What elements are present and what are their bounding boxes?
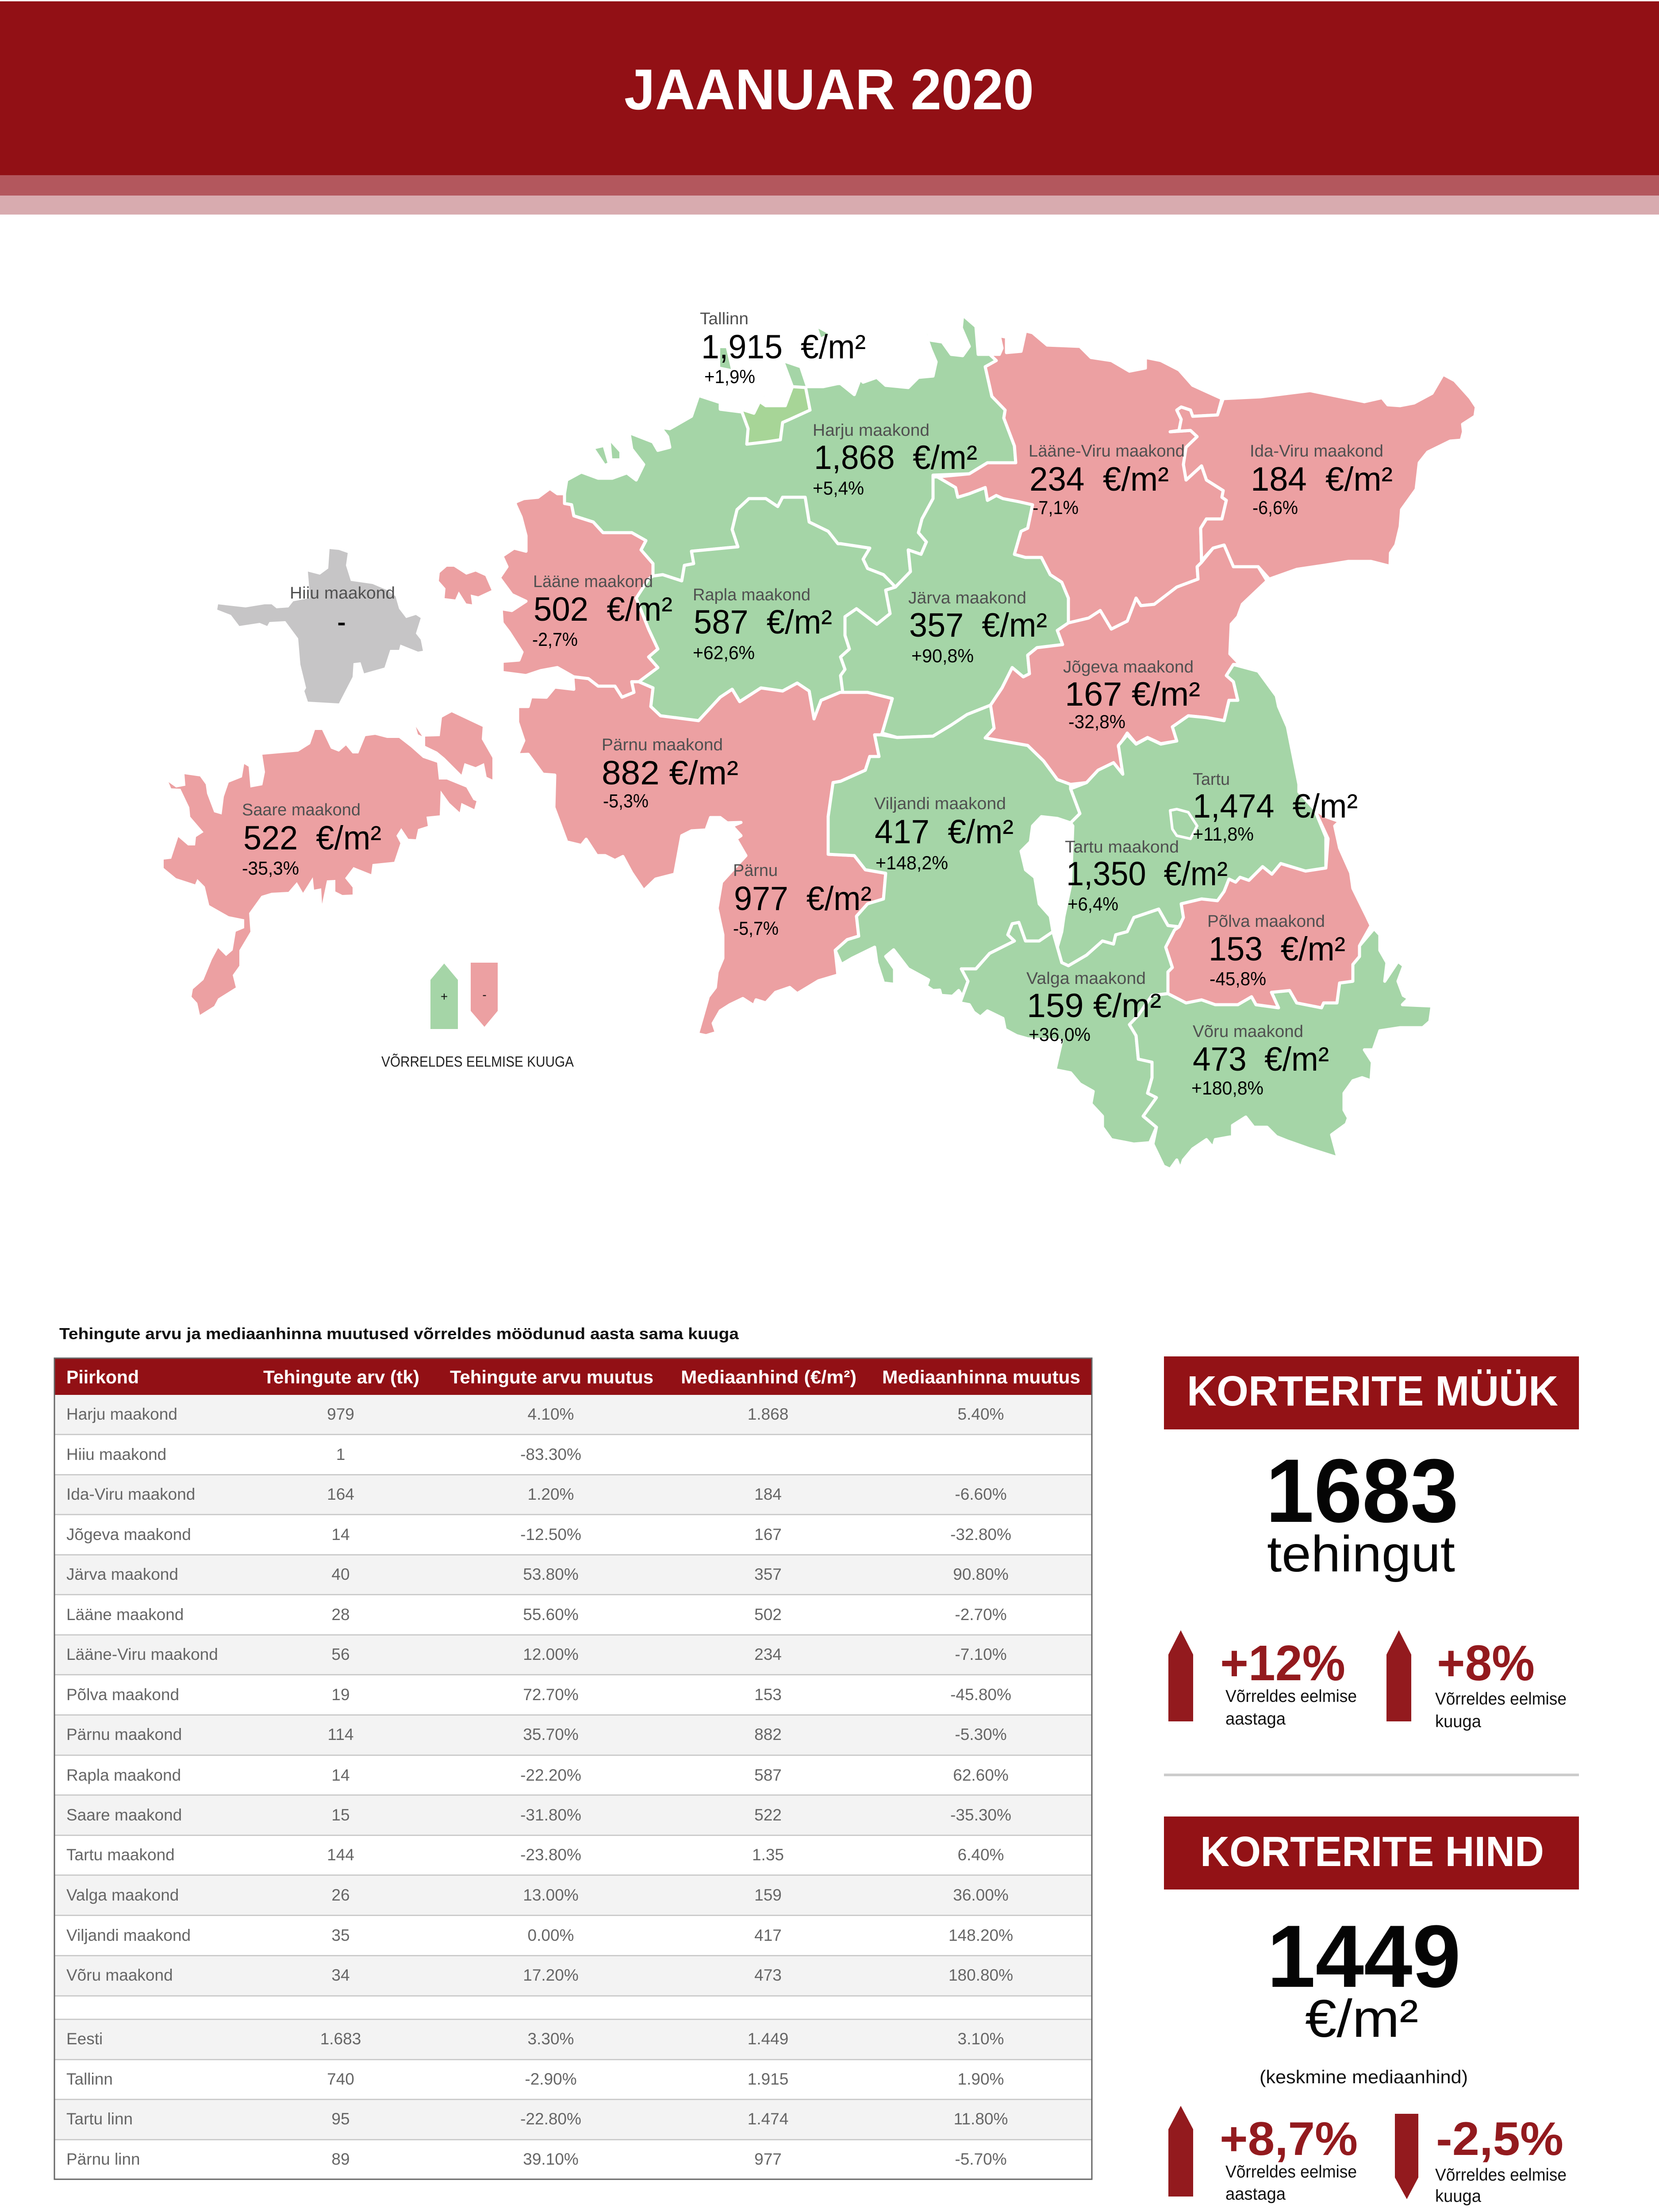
row: Hiiu maakond: 1 [336,1445,345,1463]
row: Tallinn: 1.915 [748,2070,788,2088]
map label: Lääne-Viru: Lääne-Viru maakond [1029,442,1185,461]
row: Võru maakond: 17.20% [523,1966,579,1984]
row: Viljandi maakond: 148.20% [949,1926,1013,1944]
map label: Jõgeva: 167 €/m² [1065,676,1200,713]
stat: -2,5%: -2,5% [1436,2112,1563,2165]
map label: Hiiu: - [337,603,346,641]
row: Ida-Viru maakond: 1.20% [528,1485,574,1503]
row: Saare maakond: 15 [331,1806,350,1824]
row: Põlva maakond: Põlva maakond [66,1686,179,1704]
stat: -2,5%: Võrreldes eelmise [1435,2166,1567,2185]
row: Järva maakond: 53.80% [523,1565,579,1583]
stat: +8,7% [1220,2112,1358,2204]
row: Pärnu maakond: Pärnu maakond [66,1725,182,1743]
row: Järva maakond: 357 [754,1565,782,1583]
table header: Mediaanhinna muutus [882,1367,1080,1387]
county: Rapla [636,497,895,721]
row: Eesti: 1.449 [748,2030,788,2048]
stat: +8%: +8% [1437,1635,1535,1691]
row: Eesti: 1.683 [320,2030,361,2048]
map legend [381,963,574,1070]
map label: Hiiu: Hiiu maakond [290,584,395,603]
map label: Jõgeva: Jõgeva maakond [1063,658,1194,676]
row: Rapla maakond: -22.20% [520,1766,581,1784]
row: Viljandi maakond [54,1926,1092,1956]
map label: Lääne [532,572,672,650]
county: Pärnu [518,677,892,1036]
row: Lääne-Viru maakond [54,1636,1092,1675]
county: Hiiu [217,549,423,703]
islands: Harju coast [595,329,828,464]
map label: Saare [242,801,381,879]
row: Tallinn: -2.90% [525,2070,577,2088]
row: Tallinn: 740 [327,2070,354,2088]
row: Pärnu linn: -5.70% [955,2150,1007,2168]
map label: Pärnu maakond [602,736,738,812]
stat: +12% [1220,1635,1357,1728]
row: Põlva maakond: 19 [331,1686,350,1704]
map label: Valga: 159 €/m² [1027,987,1161,1025]
row: Harju maakond: 5.40% [958,1405,1004,1423]
map label: Lääne-Viru [1029,442,1185,518]
map label: Tartu maakond [1065,838,1228,915]
row: Tartu maakond: Tartu maakond [66,1846,175,1864]
map label: Põlva [1207,912,1345,990]
row: Lääne-Viru maakond: Lääne-Viru maakond [66,1645,218,1663]
big number: 1683 tehingut: tehingut [1267,1526,1455,1582]
map label: Valga [1026,969,1161,1045]
row: Saare maakond: 522 [754,1806,782,1824]
map label: Rapla [693,586,832,664]
county: Saare [164,730,476,1015]
row: Pärnu maakond: 35.70% [523,1725,579,1743]
stat: +12%: aastaga [1225,1709,1286,1728]
row: Ida-Viru maakond: Ida-Viru maakond [66,1485,195,1503]
row: Lääne maakond: 502 [754,1605,782,1624]
map label: Põlva: 153 €/m² [1209,930,1345,968]
city: Tallinn [738,387,810,444]
row: Pärnu maakond: 114 [327,1725,354,1743]
row: Jõgeva maakond: Jõgeva maakond [66,1525,191,1544]
county: Võru [1129,929,1432,1169]
row: Jõgeva maakond: 167 [754,1525,782,1544]
row: Ida-Viru maakond: 164 [327,1485,354,1503]
map label: Pärnu [733,861,872,939]
row: Viljandi maakond: 417 [754,1926,782,1944]
big number: 1449 €/m²: (keskmine mediaanhind) [1260,2066,1468,2087]
map label: Pärnu: 977 €/m² [734,880,872,918]
map label: Jõgeva: -32,8% [1068,711,1125,733]
map label: Ida-Viru: Ida-Viru maakond [1250,442,1383,461]
map label: Harju: 1,868 €/m² [814,439,977,476]
arrow up: kuu [1386,1630,1411,1721]
panel: korterite müük [1164,1356,1579,1731]
map label: Tallinn [700,310,866,388]
stat: -2,5% [1435,2112,1567,2206]
map label: Hiiu [290,584,395,641]
row: Tartu linn [54,2100,1092,2140]
stat: +8%: kuuga [1435,1712,1481,1731]
map legend: VÕRRELDES EELMISE KUUGA [381,1053,574,1070]
county: Ida-Viru [1170,374,1476,579]
row: Võru maakond [54,1956,1092,1997]
row: Jõgeva maakond: -32.80% [950,1525,1011,1544]
map label: Võru: Võru maakond [1193,1022,1303,1041]
row: Saare maakond: Saare maakond [66,1806,182,1824]
row: Põlva maakond: 72.70% [523,1686,579,1704]
row: Lääne maakond: Lääne maakond [66,1605,184,1624]
map label: Saare: 522 €/m² [243,819,381,857]
table header [54,1359,1092,1395]
row: Pärnu maakond: 882 [754,1725,782,1743]
row: Pärnu maakond: -5.30% [955,1725,1007,1743]
row: Võru maakond: 34 [331,1966,350,1984]
map label: Rapla: 587 €/m² [694,603,832,641]
island: Muhu [425,712,492,780]
map label: Järva: Järva maakond [908,589,1026,607]
row: Järva maakond: Järva maakond [66,1565,178,1583]
map label: Pärnu maakond: 882 €/m² [602,754,738,792]
table header: Tehingute arvu muutus [450,1367,653,1387]
row: Võru maakond: 473 [754,1966,782,1984]
row: Rapla maakond [54,1766,1092,1796]
county: Põlva [1166,809,1371,1008]
county: Jõgeva [985,545,1267,784]
row: Lääne maakond: -2.70% [955,1605,1007,1624]
row: Hiiu maakond: Hiiu maakond [66,1445,166,1463]
map of Estonia [164,315,1476,1169]
row: Eesti [54,2019,1092,2060]
map label: Võru [1191,1022,1329,1099]
county: Tartu [1057,664,1326,966]
header banner [0,1,1659,215]
row: Viljandi maakond: 0.00% [528,1926,574,1944]
map label: Tartu maakond: Tartu maakond [1065,838,1179,856]
map label: Tartu: 1,474 €/m² [1193,787,1358,825]
big number: 1683 tehingut: 1683 [1266,1440,1459,1541]
row: Tartu linn: 1.474 [748,2110,788,2128]
row: Ida-Viru maakond [54,1475,1092,1515]
map label: Võru: 473 €/m² [1193,1041,1329,1078]
map label: Ida-Viru: -6,6% [1252,497,1298,518]
map label: Tartu: +11,8% [1193,824,1254,845]
arrow up: aasta [1168,2106,1193,2197]
big number: 1683 tehingut [1266,1440,1459,1582]
row: Lääne-Viru maakond: 234 [754,1645,782,1663]
row: Pärnu maakond [54,1716,1092,1756]
map label: Pärnu: -5,7% [733,918,779,939]
row: Valga maakond [54,1876,1092,1916]
map label: Viljandi: 417 €/m² [875,813,1014,851]
stat: +12%: +12% [1220,1635,1345,1691]
table title: Tehingute arvu ja mediaanhinna muutused võrreldes möödunud aasta sama kuuga [59,1325,739,1343]
map label: Võru: +180,8% [1191,1078,1263,1099]
map label: Tartu: Tartu [1193,770,1230,789]
row: Valga maakond: Valga maakond [66,1886,179,1904]
row: Põlva maakond: 153 [754,1686,782,1704]
map label: Tartu [1193,770,1358,845]
data table [54,1358,1092,2179]
map label: Pärnu: Pärnu [733,861,778,880]
row: Eesti: 3.30% [528,2030,574,2048]
row: Võru maakond: Võru maakond [66,1966,173,1984]
row: Eesti: 3.10% [958,2030,1004,2048]
map label: Viljandi [874,795,1014,874]
row: Valga maakond: 13.00% [523,1886,579,1904]
row: Lääne-Viru maakond: -7.10% [955,1645,1007,1663]
row: Jõgeva maakond: -12.50% [520,1525,581,1544]
map label: Saare: Saare maakond [242,801,361,819]
row: Lääne-Viru maakond: 56 [331,1645,350,1663]
map label: Tallinn: Tallinn [700,310,749,328]
row: Valga maakond: 159 [754,1886,782,1904]
map label: Pärnu maakond: Pärnu maakond [602,736,723,754]
county: Lääne [499,488,658,697]
map label: Järva: 357 €/m² [909,607,1047,644]
table header: Piirkond [66,1367,139,1387]
stat: +12%: Võrreldes eelmise [1225,1687,1357,1706]
map label: Tartu maakond: +6,4% [1068,894,1118,915]
row: Pärnu linn: 39.10% [523,2150,579,2168]
row: Tartu linn: 11.80% [954,2110,1008,2128]
row: Tartu maakond: 144 [327,1846,354,1864]
islet [416,727,422,736]
row: Lääne maakond: 28 [331,1605,350,1624]
county: Valga [960,909,1179,1144]
row: Järva maakond: 90.80% [953,1565,1009,1583]
row: Harju maakond [54,1395,1092,1435]
row: Lääne maakond [54,1605,1092,1636]
county: Viljandi [828,705,1080,997]
map label: Harju: +5,4% [813,478,864,499]
row: Jõgeva maakond: 14 [331,1525,350,1544]
big number: 1449 €/m²: €/m² [1305,1989,1418,2048]
map label: Viljandi: +148,2% [876,853,948,874]
map label: Harju: Harju maakond [813,421,929,440]
map label: Tallinn: +1,9% [704,366,755,388]
map label: Lääne-Viru: 234 €/m² [1029,461,1169,498]
row: Hiiu maakond [54,1445,1092,1475]
row: Pärnu linn [66,2150,1007,2168]
heading: korterite müük: KORTERITE MÜÜK [1187,1367,1558,1415]
row: Tartu maakond [54,1846,1092,1876]
row: Hiiu maakond: -83.30% [520,1445,581,1463]
row: Pärnu linn: Pärnu linn [66,2150,140,2168]
stat: +8%: Võrreldes eelmise [1435,1690,1567,1709]
row: Saare maakond [54,1796,1092,1836]
row: Tallinn [54,2070,1092,2100]
table header: Mediaanhind (€/m²) [681,1367,856,1387]
row: Saare maakond: -35.30% [950,1806,1011,1824]
map legend: + [441,990,448,1003]
row: Harju maakond: 1.868 [748,1405,788,1423]
stat: +8,7%: Võrreldes eelmise [1225,2162,1357,2181]
row: Tartu linn: Tartu linn [66,2110,133,2128]
map label: Lääne-Viru: -7,1% [1033,497,1079,518]
header banner: JAANUAR 2020 [624,57,1034,122]
row: Tallinn: 1.90% [958,2070,1004,2088]
stat: +8,7%: aastaga [1225,2185,1286,2204]
row: Rapla maakond: 62.60% [953,1766,1009,1784]
map label: Ida-Viru: 184 €/m² [1251,461,1393,498]
map label: Rapla: Rapla maakond [693,586,810,604]
map label: Lääne: Lääne maakond [533,572,653,591]
map label: Pärnu maakond: -5,3% [603,791,649,812]
row: Viljandi maakond: 35 [331,1926,350,1944]
stat: -2,5%: kuuga [1435,2187,1481,2206]
row: Põlva maakond: -45.80% [950,1686,1011,1704]
row: Tartu linn: 95 [331,2110,350,2128]
row: Lääne maakond: 55.60% [523,1605,579,1624]
map label: Valga: Valga maakond [1026,969,1146,988]
arrow down: kuu [1395,2114,1418,2199]
county: Järva [841,477,1068,737]
map label: Järva: +90,8% [911,645,974,667]
heading: korterite müük [1164,1356,1579,1429]
map label: Tallinn: 1,915 €/m² [701,328,866,366]
map label: Lääne: -2,7% [532,629,578,650]
row: Eesti: Eesti [66,2030,103,2048]
county: Harju [565,315,1016,587]
map label: Järva [908,589,1047,667]
map label: Põlva: Põlva maakond [1207,912,1325,931]
row: Tartu maakond: 6.40% [958,1846,1004,1864]
map label: Saare: -35,3% [242,858,299,879]
row: Pärnu linn: 977 [754,2150,782,2168]
table header: Tehingute arv (tk) [263,1367,419,1387]
map legend: - [482,988,487,1002]
row: Jõgeva maakond [54,1525,1092,1555]
row: Harju maakond: 4.10% [528,1405,574,1423]
row: Järva maakond: 40 [331,1565,350,1583]
panel: korterite hind [1164,1816,1579,2206]
map label: Lääne: 502 €/m² [534,591,672,628]
big number: 1449 €/m²: 1449 [1267,1907,1461,2006]
row: Lääne-Viru maakond: 12.00% [523,1645,579,1663]
row: Rapla maakond: Rapla maakond [66,1766,181,1784]
row: Ida-Viru maakond: -6.60% [955,1485,1007,1503]
map label: Viljandi: Viljandi maakond [874,795,1006,813]
stat: +8% [1435,1635,1567,1731]
map label: Valga: +36,0% [1029,1024,1091,1045]
stat: +8,7%: +8,7% [1220,2112,1358,2165]
map label: Põlva: -45,8% [1210,968,1266,990]
row: Tartu maakond: 1.35 [752,1846,784,1864]
row: Järva maakond [54,1555,1092,1595]
map label: Jõgeva [1063,658,1200,733]
row: Valga maakond: 36.00% [953,1886,1009,1904]
row: Ida-Viru maakond: 184 [754,1485,782,1503]
heading: korterite hind [1164,1816,1579,1889]
heading: korterite hind: KORTERITE HIND [1200,1828,1544,1875]
row: Võru maakond: 180.80% [949,1966,1013,1984]
row: Saare maakond: -31.80% [520,1806,581,1824]
row: Tallinn: Tallinn [66,2070,113,2088]
row: Tartu linn: -22.80% [520,2110,581,2128]
row: Harju maakond: Harju maakond [66,1405,177,1423]
county: Lääne-Viru [937,331,1226,629]
city: Tartu [1170,809,1197,839]
row: Rapla maakond: 14 [331,1766,350,1784]
arrow up: aasta [1168,1630,1193,1721]
big number: 1449 €/m² [1260,1907,1468,2087]
row: Valga maakond: 26 [331,1886,350,1904]
map label: Ida-Viru [1250,442,1393,518]
row: Rapla maakond: 587 [754,1766,782,1784]
row: Tartu maakond: -23.80% [520,1846,581,1864]
map label: Tartu maakond: 1,350 €/m² [1066,855,1228,893]
row: Põlva maakond [54,1686,1092,1716]
row: Viljandi maakond: Viljandi maakond [66,1926,191,1944]
island: Vormsi [439,567,492,604]
map label: Harju [813,421,977,499]
row: Harju maakond: 979 [327,1405,354,1423]
map label: Rapla: +62,6% [693,642,755,664]
row: Pärnu linn: 89 [331,2150,350,2168]
